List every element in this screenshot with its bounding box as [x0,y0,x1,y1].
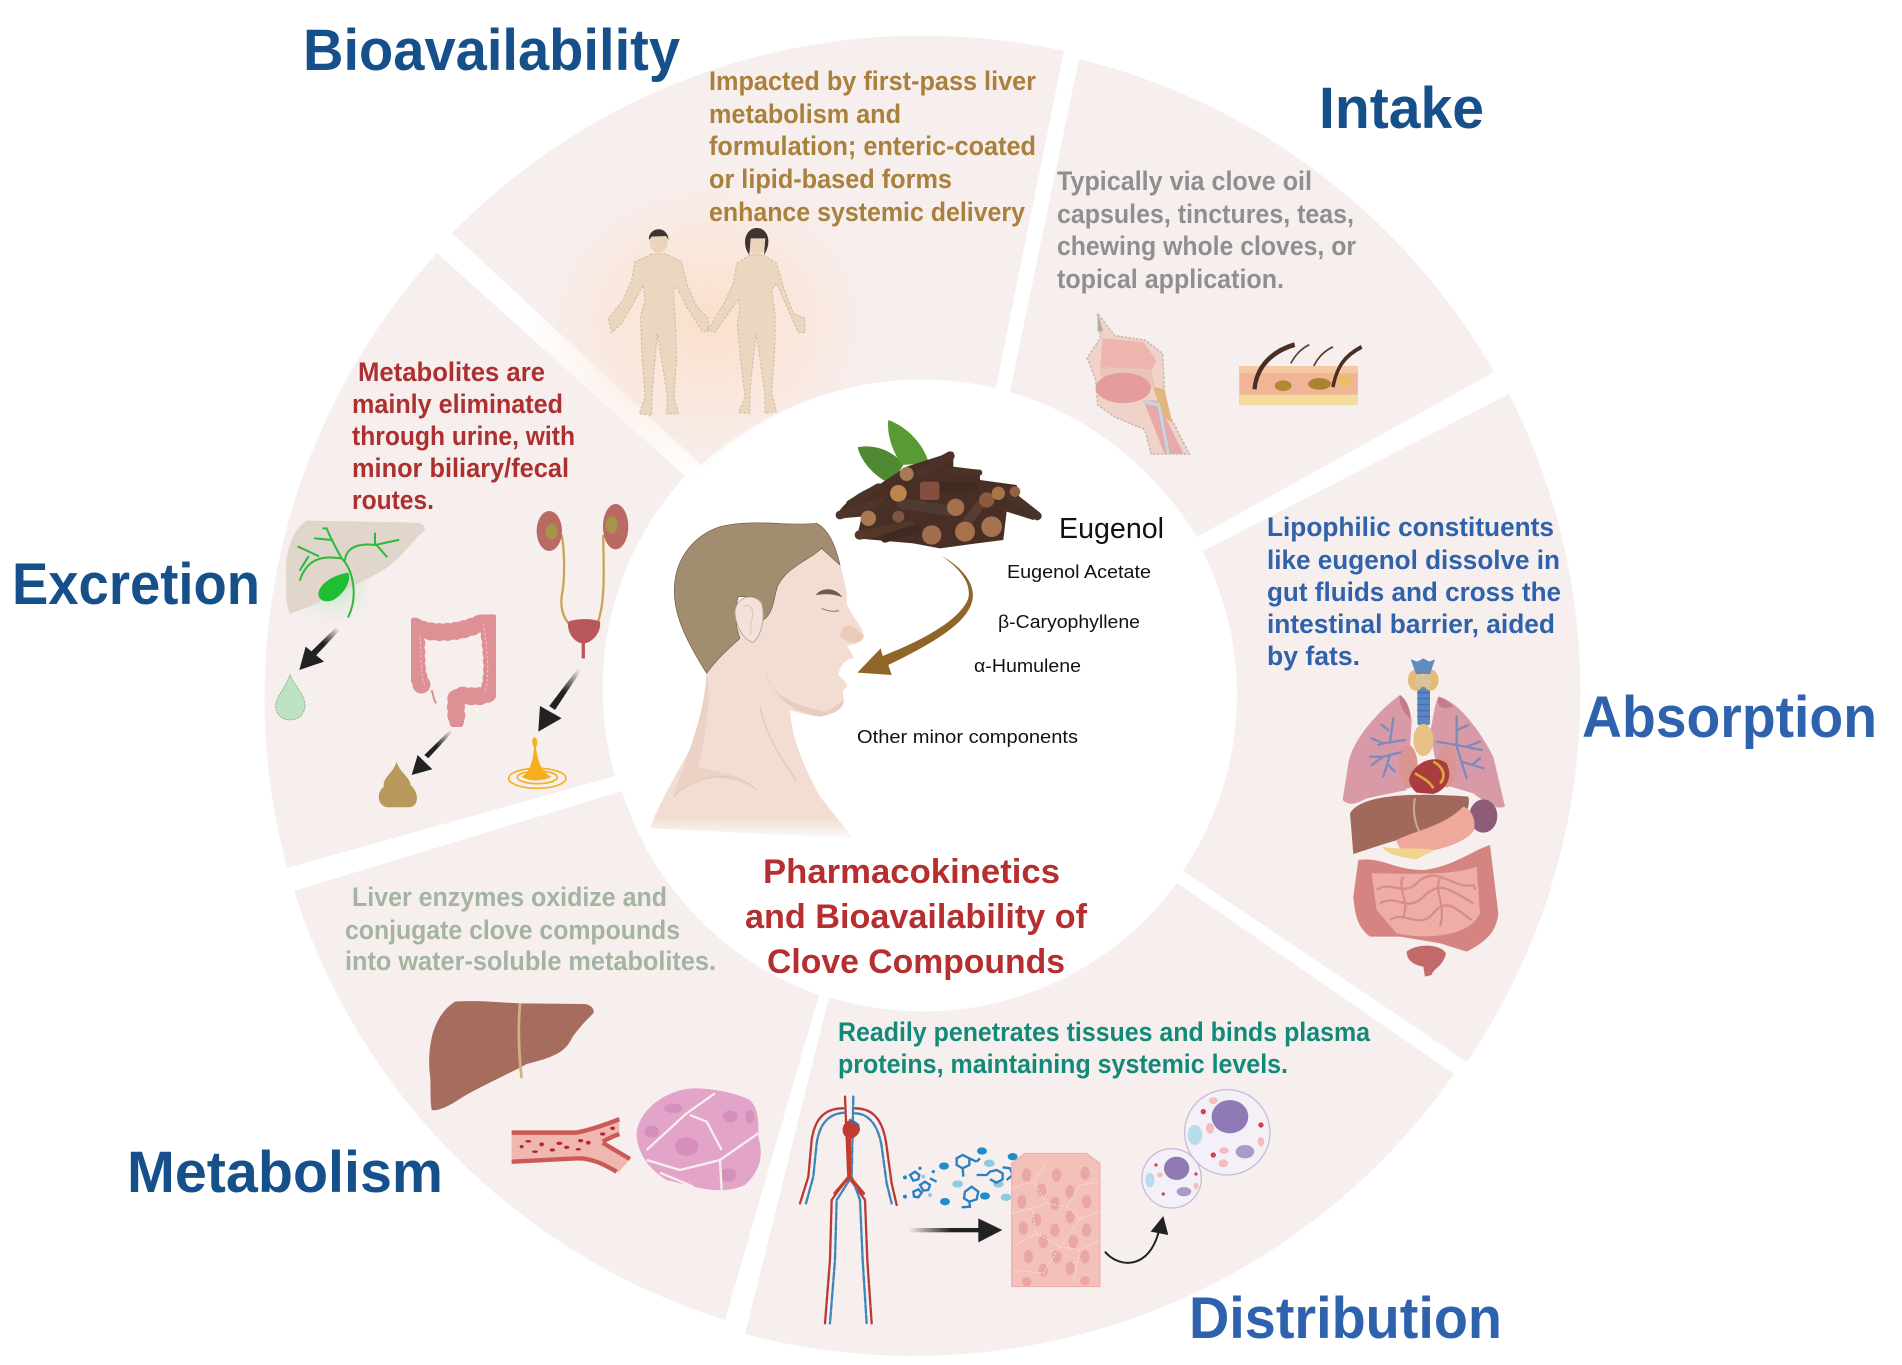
icon: kidneys, ureters and bladder [537,504,628,658]
heading: intake: Intake [1319,76,1484,141]
title [745,853,1088,981]
icon: blood vessel [512,1117,631,1173]
icon: skin cross section [1239,345,1362,405]
text: absorption description: intestinal barrier, aided [1267,609,1555,639]
icon: liver [429,1001,594,1110]
icon: clove pile with leaves [837,420,1040,548]
text: metabolism description: Liver enzymes oxidize and [352,882,667,912]
heading: excretion: Excretion [12,552,260,617]
heading: metabolism: Metabolism [127,1140,443,1205]
text: excretion description [352,357,575,515]
text: bioavailability description: Impacted by first-pass liver [709,66,1036,96]
text: bioavailability description [709,66,1036,227]
glow behind bodies [518,157,898,487]
center circle [607,380,1237,1010]
panel: distribution [745,883,1502,1356]
text: excretion description: mainly eliminated [352,389,563,419]
label: Eugenol Acetate: Eugenol Acetate [1007,561,1151,582]
text: bioavailability description: formulation; enteric-coated [709,131,1036,161]
icon: tissue block [1012,1153,1100,1287]
text: intake description [1057,166,1356,294]
text: excretion description: Metabolites are [358,357,545,387]
text: intake description: Typically via clove oil [1057,166,1312,196]
text: distribution description: proteins, maintaining systemic levels. [838,1049,1288,1079]
panel: bioavailability [303,18,1064,487]
icon: nasal and oral cavity section [1087,313,1189,454]
panel: metabolism [127,791,819,1320]
text: absorption description: like eugenol dissolve in [1267,545,1560,575]
white hub [607,380,1237,1010]
icon: feces [379,762,417,807]
heading: distribution: Distribution [1189,1286,1502,1351]
arrow: tissue to cells [1105,1216,1168,1263]
label: beta-Caryophyllene: β-Caryophyllene [998,611,1140,632]
text: absorption description: gut fluids and cross the [1267,577,1561,607]
wedge: distribution [745,883,1454,1356]
text: absorption description [1267,512,1561,671]
arrow: circulation to tissue [908,1218,1002,1242]
text: intake description: capsules, tinctures, teas, [1057,199,1354,229]
icon: cells [1142,1090,1270,1208]
icon: molecules [903,1147,1018,1207]
wedge: bioavailability [452,36,1064,465]
icon: colon [415,620,492,722]
title: Clove Compounds [767,943,1065,981]
panel: absorption [1183,394,1877,1062]
text: metabolism description: into water-soluble metabolites. [345,946,716,976]
icon: liver with bile ducts [283,521,425,633]
text: bioavailability description: enhance systemic delivery [709,197,1025,227]
wedge: intake [1009,59,1494,537]
text: distribution description [838,1017,1370,1079]
heading: absorption: Absorption [1582,685,1877,750]
wedge: metabolism [294,791,819,1320]
text: metabolism description [345,882,716,976]
text: absorption description: by fats. [1267,641,1360,671]
arrow: clove to mouth [857,556,973,675]
heading: bioavailability: Bioavailability [303,18,680,83]
panel: excretion [12,253,685,868]
wedge: absorption [1183,394,1580,1062]
icon: urine splash [509,737,566,788]
text: excretion description: minor biliary/fecal [352,453,569,483]
wedge: excretion [265,253,685,868]
arrow: colon to feces [412,730,452,775]
text: bioavailability description: metabolism and [709,99,901,129]
text: excretion description: routes. [352,485,434,515]
panel: intake [1009,59,1494,537]
label: alpha-Humulene: α-Humulene [974,655,1081,676]
title: Pharmacokinetics [763,853,1060,891]
icon: bile droplet [276,675,305,720]
arrow: liver to bile [299,627,339,670]
text: intake description: topical application. [1057,264,1284,294]
icon: torso organs [1343,658,1505,977]
text: bioavailability description: or lipid-based forms [709,164,952,194]
text: excretion description: through urine, with [352,421,575,451]
icon: tissue lobes [637,1088,761,1190]
text: distribution description: Readily penetrates tissues and binds plasma [838,1017,1370,1047]
arrow: kidney to urine [538,669,581,732]
label: other minor components: Other minor components [857,726,1078,747]
icon: human head in profile [650,523,864,838]
title: and Bioavailability of [745,898,1088,936]
icon: man and woman holding hands [608,228,805,415]
text: metabolism description: conjugate clove compounds [345,915,680,945]
label: Eugenol: Eugenol [1059,513,1164,545]
text: intake description: chewing whole cloves, or [1057,231,1356,261]
text: absorption description: Lipophilic constituents [1267,512,1554,542]
icon: circulatory system body [800,1097,897,1323]
